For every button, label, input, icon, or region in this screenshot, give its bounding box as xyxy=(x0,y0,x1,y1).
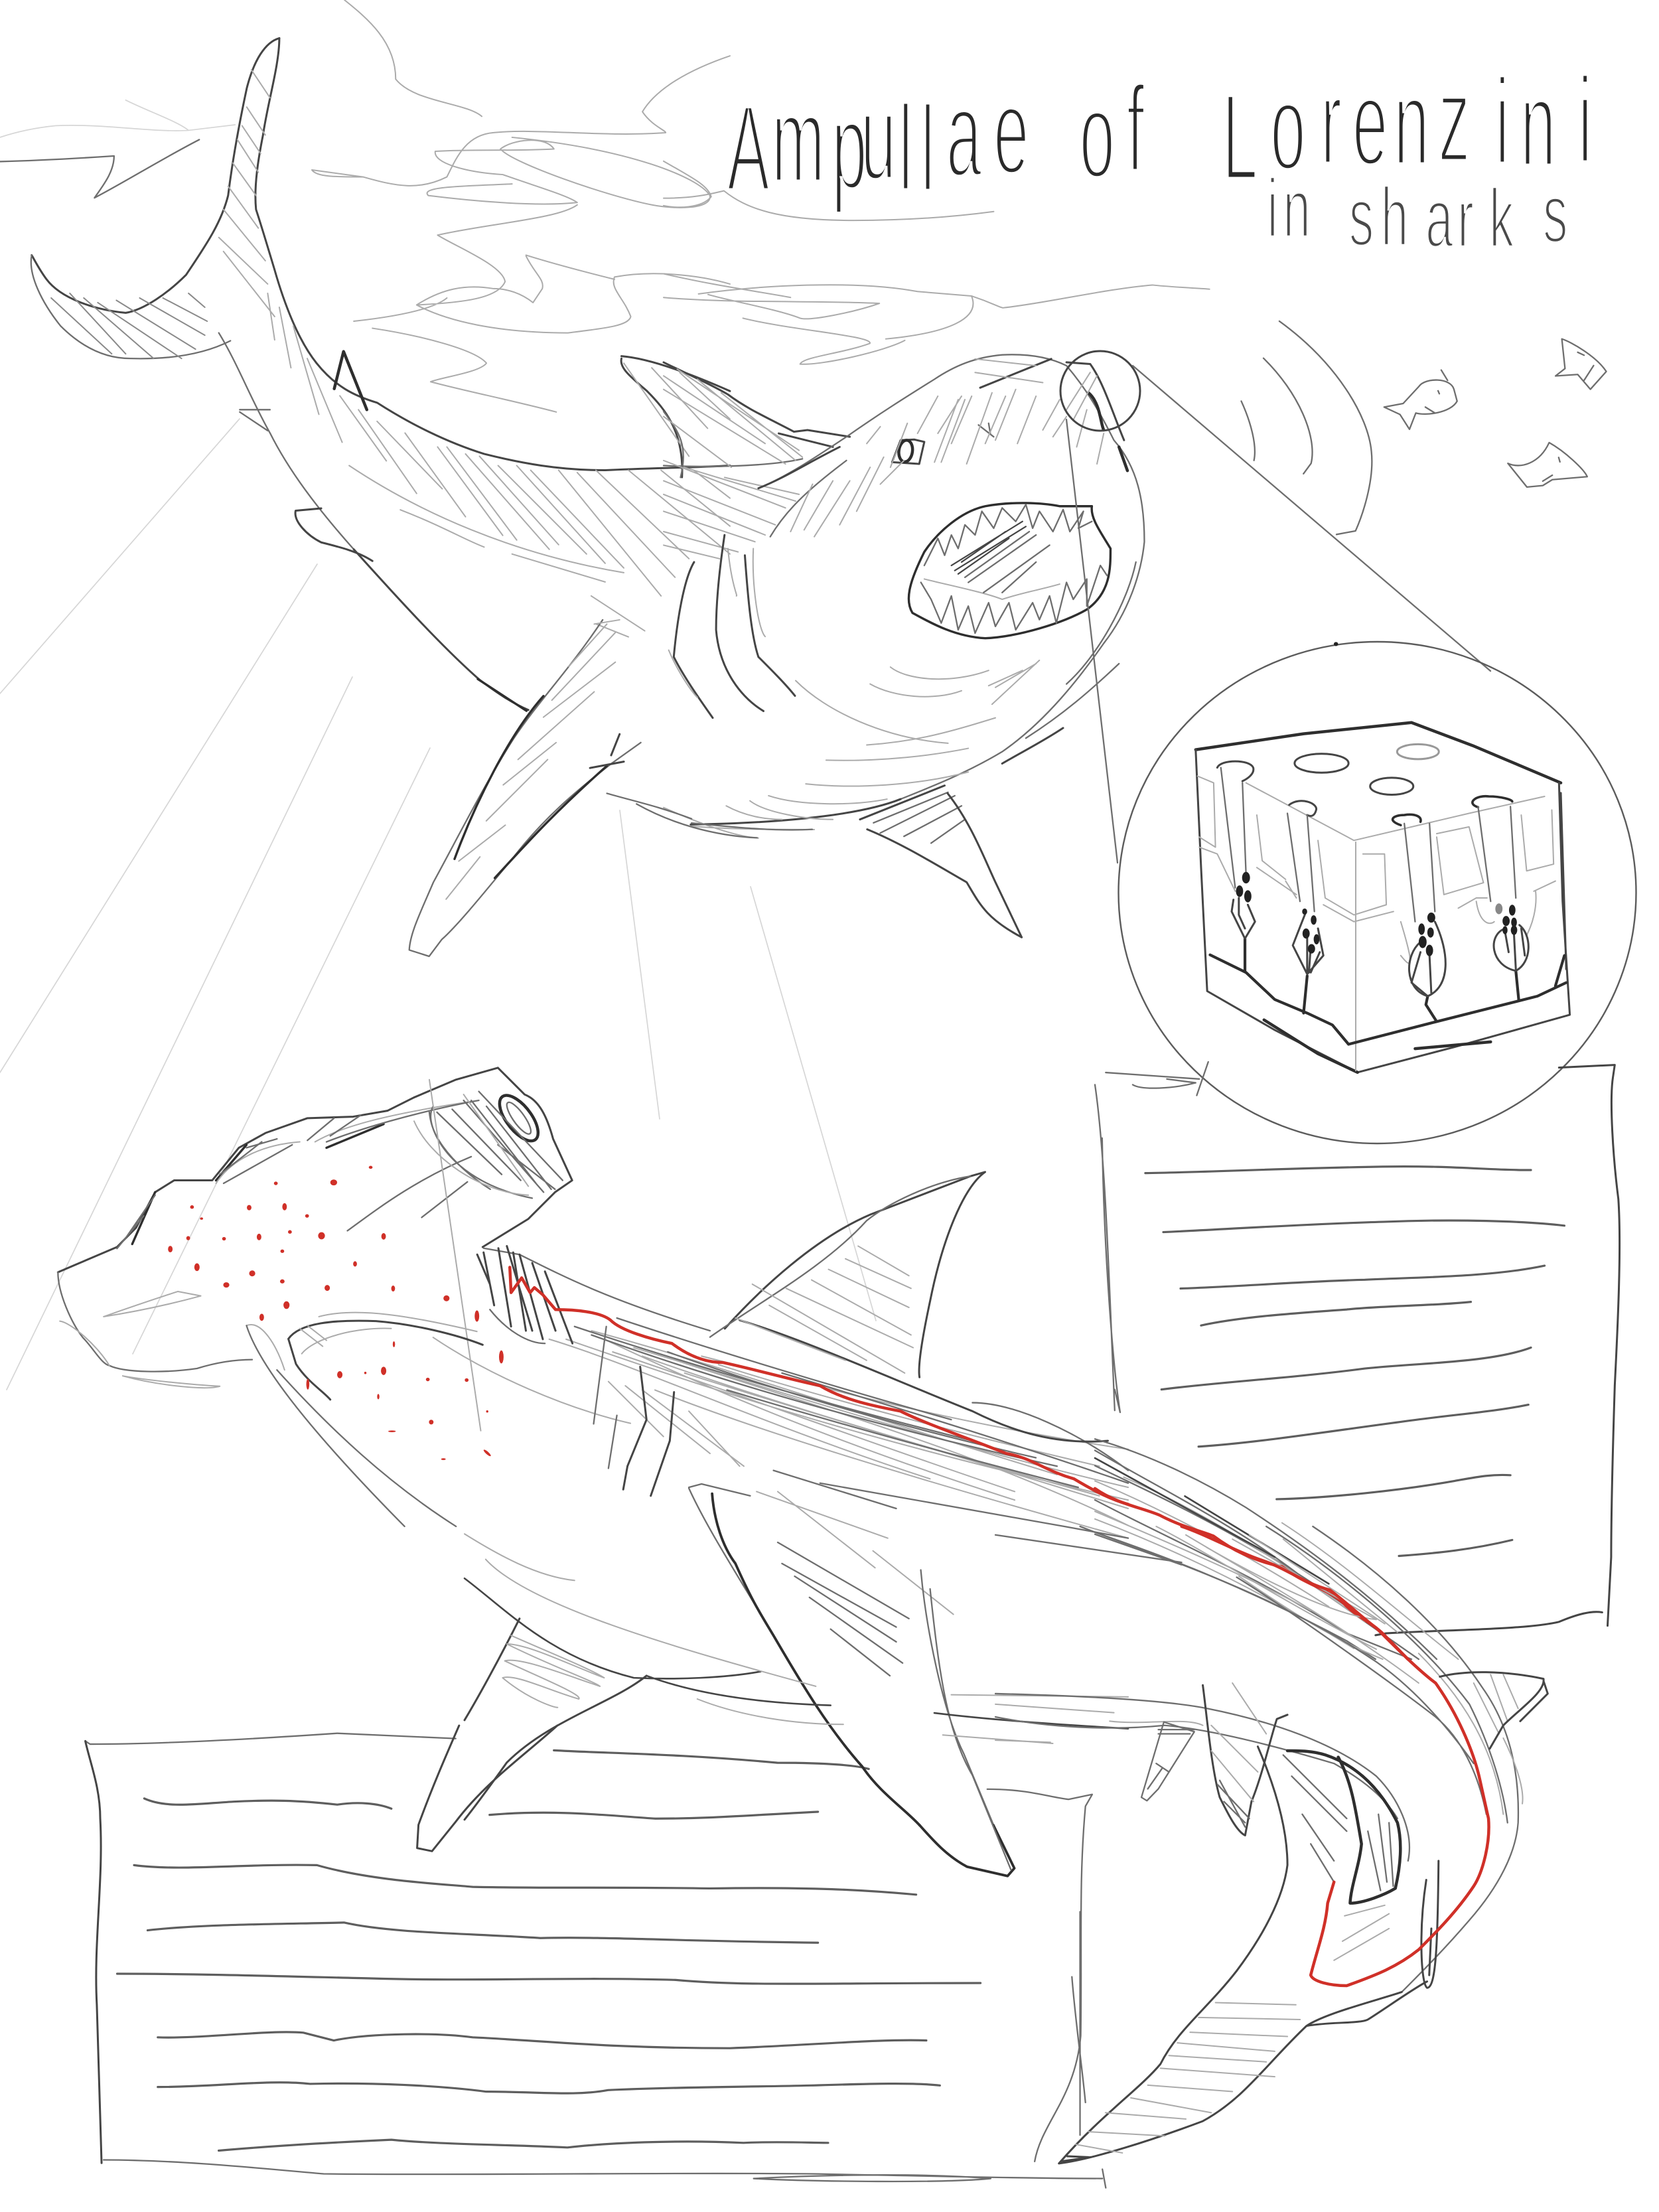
pectoral fin inner edge xyxy=(972,1775,1011,1870)
fish one xyxy=(1384,370,1457,429)
red lateral line: front xyxy=(510,1267,1128,1505)
fish three xyxy=(1508,443,1587,487)
belly lines xyxy=(465,1578,1128,1729)
text panel: bottom xyxy=(86,1733,1106,2188)
large pectoral fin xyxy=(689,1484,993,1825)
sense arcs xyxy=(1242,321,1372,534)
eye xyxy=(892,439,924,464)
jaw shading xyxy=(664,660,1039,838)
placeholder text lines xyxy=(117,1750,981,2150)
tail section xyxy=(995,1526,1548,2164)
mouth xyxy=(908,503,1110,638)
body edge below head xyxy=(246,1325,456,1526)
head outline xyxy=(758,354,1144,799)
left pectoral fin and belly xyxy=(409,620,1022,956)
skin block with ampullae xyxy=(1196,642,1570,1072)
mid body sweep xyxy=(1095,1439,1459,1659)
snout indicator circle xyxy=(1060,351,1140,431)
dorsal fin start xyxy=(621,356,730,477)
dorsal fin trailing edge xyxy=(664,362,850,447)
head outline xyxy=(58,1068,572,1272)
dark tail fold xyxy=(1287,1751,1400,1903)
small fins below body xyxy=(623,1366,674,1496)
bottom shark: hammerhead xyxy=(58,1068,1548,2164)
small anal fin xyxy=(1141,1722,1194,1801)
block edges xyxy=(1196,750,1570,1072)
body shading xyxy=(549,1331,1128,1614)
light rays in the water xyxy=(0,419,876,1390)
gills xyxy=(674,535,795,718)
rear body and tail xyxy=(0,0,730,710)
right pectoral fin shading xyxy=(860,786,944,820)
ampulla bulbs xyxy=(1232,898,1528,996)
second dorsal fin xyxy=(1440,1672,1548,1749)
body arcs xyxy=(995,1526,1518,1992)
mouth xyxy=(289,1321,482,1400)
red ampullae pores xyxy=(168,1166,504,1460)
title: Ampullae of Lorenzini: Ampullae of Lorenzini xyxy=(727,51,1592,218)
front body, dorsal fin and pectoral fin xyxy=(465,1172,1128,1825)
fin tips over bottom panel xyxy=(417,1726,1015,1876)
pelvic fin tip xyxy=(417,1726,557,1851)
eye xyxy=(492,1091,545,1145)
text panel: right xyxy=(1095,1062,1620,1635)
body top outline xyxy=(484,1248,1128,1471)
head, gills and mouth xyxy=(664,354,1144,843)
enlarged skin cross-section circle xyxy=(1119,642,1636,1143)
under-eye shading xyxy=(429,1092,563,1198)
fish two xyxy=(1555,339,1607,390)
sense arcs and prey fish xyxy=(1242,321,1607,534)
panel outline xyxy=(86,1733,1106,2188)
tissue layer boxes xyxy=(1197,776,1555,964)
water ripples, upper right xyxy=(664,161,1210,364)
nerve xyxy=(1210,938,1566,1044)
pelvic fin scribble xyxy=(502,1635,604,1708)
belly continuation xyxy=(995,1694,1409,1861)
canals xyxy=(1221,768,1516,922)
callout lines from snout to enlarged cube xyxy=(1066,366,1490,863)
gill hatching xyxy=(477,1246,573,1343)
rear clasper marks xyxy=(1421,1861,1439,1988)
panel outline xyxy=(1376,1065,1620,1635)
lower tail lobe xyxy=(1059,1747,1427,2164)
dorsal fin xyxy=(710,1172,985,1377)
head hatching xyxy=(790,359,1104,537)
red lateral line: tail xyxy=(1182,1526,1489,1986)
top shark: great white, mouth open xyxy=(0,0,1144,956)
panel left edge xyxy=(1095,1062,1208,1412)
hammerhead head with ampullae pores xyxy=(58,1068,630,1526)
subtitle: in sharks: in sharks xyxy=(1267,162,1567,265)
right pectoral fin xyxy=(867,793,1022,937)
placeholder text lines xyxy=(1145,1167,1564,1556)
sensory cell nuclei xyxy=(1236,642,1517,956)
clasper fin xyxy=(1203,1683,1287,1836)
red lateral line: middle xyxy=(1095,1489,1408,1659)
block outline xyxy=(1196,723,1561,783)
surface pores xyxy=(1217,744,1512,825)
left pelvic fin xyxy=(465,1619,646,1820)
pectoral fin tip xyxy=(920,1825,1015,1876)
